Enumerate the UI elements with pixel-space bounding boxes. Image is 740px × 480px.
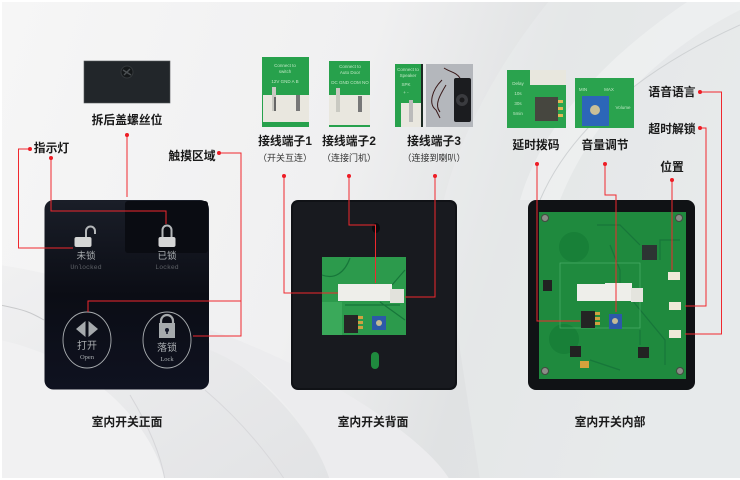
heading: connector 2 [322, 134, 376, 163]
screws [542, 214, 684, 374]
heading: rear cover screw: 拆后盖螺丝位 [92, 113, 163, 127]
heading: indicator light: 指示灯 [34, 141, 69, 155]
potentiometer [609, 314, 622, 329]
thumbnail: connector 3: Connect to [397, 67, 419, 72]
label: unlocked [70, 250, 102, 271]
label: locked: Locked [155, 264, 179, 271]
thumbnail: connector 1: 12V GND A B [271, 79, 299, 84]
panel: switch front [44, 200, 209, 390]
heading: touch area: 触摸区域 [168, 149, 216, 163]
callout dots [28, 90, 702, 182]
icon: unlocked padlock [74, 226, 95, 247]
thumbnail: connector 3: SPK [401, 82, 411, 87]
heading: connector 1: （开关互连） [258, 152, 312, 163]
connectors [577, 284, 606, 301]
heading: voice language: 语音语言 [648, 85, 696, 99]
heading: connector 3: 接线端子3 [407, 134, 461, 148]
thumbnail: volume potentiometer: Volume [615, 105, 631, 110]
thumbnail: connector 2: DC GND COM NO [331, 80, 369, 85]
chips [642, 245, 657, 260]
heading: connector 3: （连接到喇叭） [402, 152, 466, 163]
heading: volume: 音量调节 [581, 138, 629, 152]
heading: connector 2: 接线端子2 [322, 134, 376, 148]
thumbnail: volume potentiometer [575, 78, 634, 128]
heading: position: 位置 [660, 160, 684, 174]
button: open [63, 312, 111, 368]
side switches [668, 272, 680, 280]
heading: connector 3 [402, 134, 466, 163]
icon: locked padlock [158, 226, 176, 247]
button: open: 打开 [77, 339, 97, 352]
thumbnail: delay DIP switch [507, 70, 566, 128]
heading: front caption: 室内开关正面 [92, 415, 163, 429]
thumbnail: connector 3: + - [403, 90, 409, 95]
button: open: Open [80, 354, 95, 361]
label: locked [155, 250, 179, 271]
label: locked: 已锁 [157, 250, 177, 262]
label: unlocked: Unlocked [70, 264, 102, 271]
thumbnail: connector 2 [329, 61, 370, 127]
photo: speaker [426, 64, 473, 127]
traces [590, 225, 680, 370]
button: lock: 落锁 [157, 341, 177, 354]
label: unlocked: 未锁 [76, 250, 96, 262]
heading: timeout unlock: 超时解锁 [648, 122, 696, 136]
DIP switch [581, 311, 595, 328]
heading: interior caption: 室内开关内部 [575, 415, 646, 429]
button: lock [143, 312, 191, 368]
thumbnail: connector 3: Speaker [400, 73, 417, 78]
circuit window [322, 257, 406, 335]
button: lock: Lock [160, 356, 174, 363]
thumbnail: delay DIP switch: 30s [514, 101, 522, 106]
thumbnail: volume potentiometer: MIN [579, 87, 587, 92]
thumbnail: connector 2: Connect to [339, 64, 361, 69]
heading: delay DIP: 延时拨码 [512, 138, 560, 152]
thumbnail: delay DIP switch: 5min [513, 111, 523, 116]
panel: switch interior [528, 200, 695, 390]
thumbnail: connector 1: switch [279, 69, 292, 74]
heading: connector 1 [258, 134, 312, 163]
heading: back caption: 室内开关背面 [338, 415, 409, 429]
thumbnail: delay DIP switch: Delay [512, 81, 524, 86]
thumbnail: connector 3 [395, 64, 423, 127]
panel: switch back [291, 200, 457, 390]
thumbnail: connector 2: Auto Door [340, 70, 361, 75]
heading: connector 1: 接线端子1 [258, 134, 312, 148]
heading: connector 2: （连接门机） [322, 152, 376, 163]
photo: rear cover screw position [84, 61, 170, 103]
thumbnail: connector 1: Connect to [274, 63, 296, 68]
thumbnail: volume potentiometer: MAX [604, 87, 614, 92]
thumbnail: delay DIP switch: 10s [514, 91, 522, 96]
callout lines [18, 92, 722, 336]
thumbnail: connector 1 [262, 57, 309, 127]
